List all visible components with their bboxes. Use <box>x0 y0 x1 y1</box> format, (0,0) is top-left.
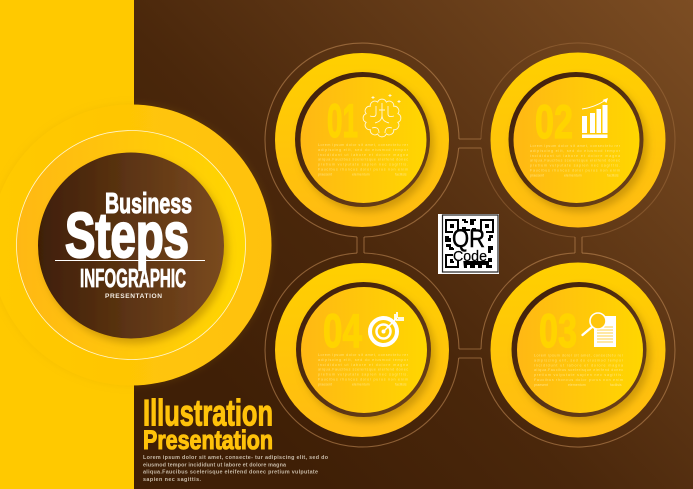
step 3 text: aliqua.Faucibus scelerisque eleifend donec <box>534 368 623 372</box>
step 1 text: praesent <box>318 172 332 176</box>
step 4 text: elementum <box>352 382 370 386</box>
heading: Business: Business <box>105 188 192 220</box>
step 1 text: Lorem ipsum dolor sit amet, consectetu rer <box>318 143 409 147</box>
step 1 text: Faucibus rhoncus dolor purus non enim <box>318 168 408 172</box>
step 2 text: adipiscing elit, sed do eiusmod tempor <box>530 149 621 153</box>
QR label: QR <box>452 225 485 253</box>
step 3 circle <box>490 262 666 438</box>
step 2 text: pretium vulputate sapien nec sagittis. <box>530 164 620 168</box>
step 2 text: Lorem ipsum dolor sit amet, consectetu rer <box>530 144 621 148</box>
step 2 circle <box>490 52 666 228</box>
step 4 text: Faucibus rhoncus dolor purus non enim <box>318 378 408 382</box>
main title circle <box>0 104 272 386</box>
number 03: 03 <box>539 304 577 357</box>
bottom heading: Presentation <box>143 425 273 455</box>
connector rings <box>265 43 675 447</box>
step 4 text: aliqua.Faucibus scelerisque eleifend donec <box>318 368 408 372</box>
step 4 text: pretium vulputate sapien nec sagittis. <box>318 373 408 377</box>
left yellow panel <box>0 0 134 489</box>
step 3 text: pretium vulputate sapien nec sagittis. <box>534 373 623 377</box>
step 1 text: incididunt ut labore et dolore magna <box>318 153 408 157</box>
icon: target with arrow <box>370 312 404 345</box>
step 4 text: Lorem ipsum dolor sit amet, consectetu rer <box>318 353 409 357</box>
step 1 text: pretium vulputate sapien nec sagittis. <box>318 163 408 167</box>
number 01: 01 <box>327 94 358 147</box>
step 1 text <box>318 143 409 176</box>
step 3 text: Faucibus rhoncus dolor purus non enim <box>534 378 623 382</box>
bottom paragraph: sapien nec sagittis. <box>143 477 202 483</box>
bottom paragraph <box>143 455 329 483</box>
QR code <box>438 214 499 274</box>
step 3 text: praesent <box>534 383 548 387</box>
step 1 text: adipiscing elit, sed do eiusmod tempor <box>318 148 409 152</box>
step 1 text: aliqua.Faucibus scelerisque eleifend donec <box>318 158 408 162</box>
bottom paragraph: aliqua.Faucibus scelerisque eleifend donec pretium vulputate <box>143 470 318 476</box>
step 2 text: incididunt ut labore et dolore magna <box>530 154 620 158</box>
icon: bar chart with arrow <box>582 98 608 138</box>
step 4 circle <box>275 263 449 437</box>
step 2 text: elementum <box>564 173 582 177</box>
heading rule <box>55 260 205 261</box>
QR label <box>452 225 488 265</box>
bottom heading <box>143 392 273 455</box>
heading: Steps: Steps <box>65 201 189 271</box>
step 2 text: Faucibus rhoncus dolor purus non enim <box>530 168 620 172</box>
number 04: 04 <box>323 304 362 357</box>
step 4 text <box>318 353 409 386</box>
step 2 text <box>530 144 621 177</box>
step 3 text <box>534 354 624 387</box>
heading: Presentation: PRESENTATION <box>105 293 162 300</box>
step 2 text: praesent <box>530 173 544 177</box>
bottom paragraph: eiusmod tempor incididunt ut labore et dolore magna <box>143 462 287 468</box>
icon: magnifier over document <box>582 313 616 347</box>
bottom paragraph: Lorem ipsum dolor sit amet, consecte- tur adipiscing elit, sed do <box>143 455 329 461</box>
step 3 text: Lorem ipsum dolor sit amet, consectetu rer <box>534 354 624 358</box>
step 2 text: facilisis <box>607 173 619 177</box>
step 3 text: incididunt ut labore et dolore magna <box>534 363 623 367</box>
QR label: Code <box>453 248 487 265</box>
step 4 text: adipiscing elit, sed do eiusmod tempor <box>318 358 409 362</box>
step 1 text: elementum <box>352 172 370 176</box>
heading: Infographic: INFOGRAPHIC <box>80 263 186 293</box>
step 4 text: praesent <box>318 382 332 386</box>
step 4 text: incididunt ut labore et dolore magna <box>318 363 408 367</box>
step 3 text: elementum <box>568 383 586 387</box>
step 4 text: facilisis <box>395 382 407 386</box>
step 3 text: adipiscing elit, sed do eiusmod tempor <box>534 358 624 362</box>
icon: brain <box>363 94 401 137</box>
bottom heading: Illustration <box>143 392 273 434</box>
number 02: 02 <box>535 95 573 148</box>
step 1 text: facilisis <box>395 172 407 176</box>
step 1 circle <box>275 53 449 227</box>
step 2 text: aliqua.Faucibus scelerisque eleifend donec <box>530 159 620 163</box>
step 3 text: facilisis <box>610 383 622 387</box>
